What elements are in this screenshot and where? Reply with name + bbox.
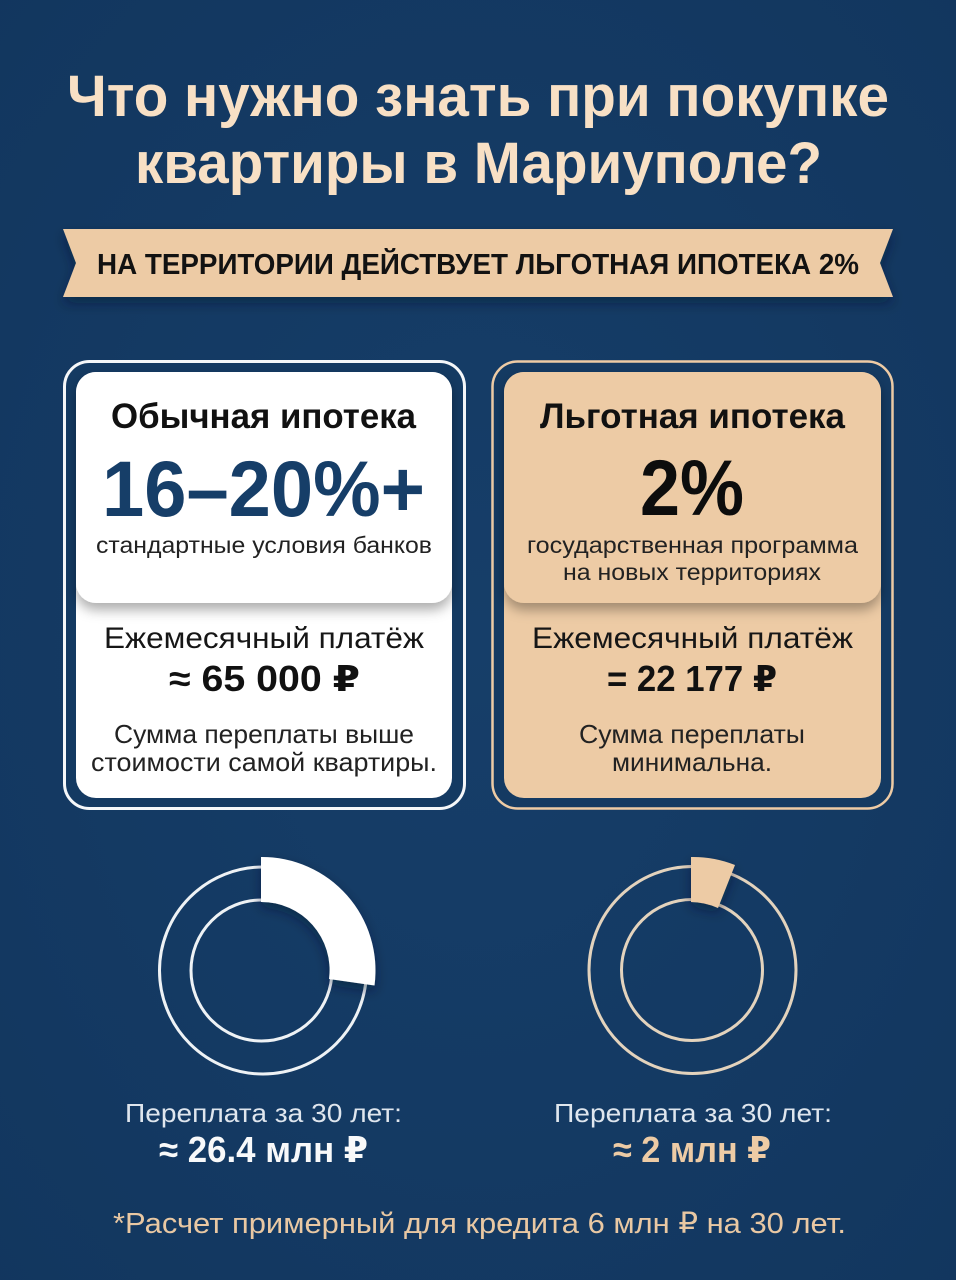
subsidized overpayment caption	[554, 1098, 832, 1170]
subsidized mortgage note: минимальна.	[612, 747, 772, 777]
subsidized mortgage top card	[504, 372, 881, 603]
subsidized mortgage note	[579, 719, 805, 777]
regular mortgage heading: Обычная ипотека	[111, 397, 417, 436]
panel: regular mortgage	[64, 362, 464, 808]
banner ribbon: НА ТЕРРИТОРИИ ДЕЙСТВУЕТ ЛЬГОТНАЯ ИПОТЕКА 2%	[97, 247, 859, 281]
regular mortgage note: Сумма переплаты выше	[114, 719, 414, 749]
subsidized mortgage heading: Льготная ипотека	[540, 397, 846, 436]
subsidized monthly payment label: Ежемесячный платёж	[532, 622, 853, 655]
banner ribbon	[63, 229, 893, 297]
regular overpayment caption	[125, 1098, 402, 1170]
donut chart: subsidized overpayment	[589, 857, 796, 1074]
subsidized mortgage rate description	[527, 532, 858, 585]
regular overpayment caption: Переплата за 30 лет:	[125, 1098, 402, 1128]
regular mortgage note: стоимости самой квартиры.	[91, 747, 437, 777]
subsidized overpayment caption: Переплата за 30 лет:	[554, 1098, 832, 1128]
subsidized mortgage rate: 2%	[640, 443, 744, 532]
donut chart: regular overpayment	[160, 857, 375, 1074]
title: Что нужно знать при покупке	[67, 64, 889, 129]
subsidized mortgage note: Сумма переплаты	[579, 719, 805, 749]
regular mortgage note	[91, 719, 437, 777]
regular monthly payment value: ≈ 65 000 ₽	[169, 658, 360, 699]
subsidized overpayment caption: ≈ 2 млн ₽	[613, 1129, 771, 1170]
regular mortgage rate: 16–20%+	[102, 444, 425, 533]
title	[67, 64, 889, 196]
subsidized mortgage rate description: на новых территориях	[563, 559, 822, 585]
regular mortgage rate description: стандартные условия банков	[96, 532, 432, 558]
footnote: *Расчет примерный для кредита 6 млн ₽ на 30 лет.	[113, 1208, 846, 1240]
subsidized monthly payment value: = 22 177 ₽	[607, 658, 777, 699]
subsidized mortgage rate description: государственная программа	[527, 532, 858, 558]
title: квартиры в Мариуполе?	[135, 131, 822, 196]
panel: subsidized mortgage	[492, 362, 892, 808]
regular monthly payment label: Ежемесячный платёж	[104, 622, 424, 655]
regular overpayment caption: ≈ 26.4 млн ₽	[159, 1129, 368, 1170]
regular mortgage top card	[76, 372, 452, 603]
